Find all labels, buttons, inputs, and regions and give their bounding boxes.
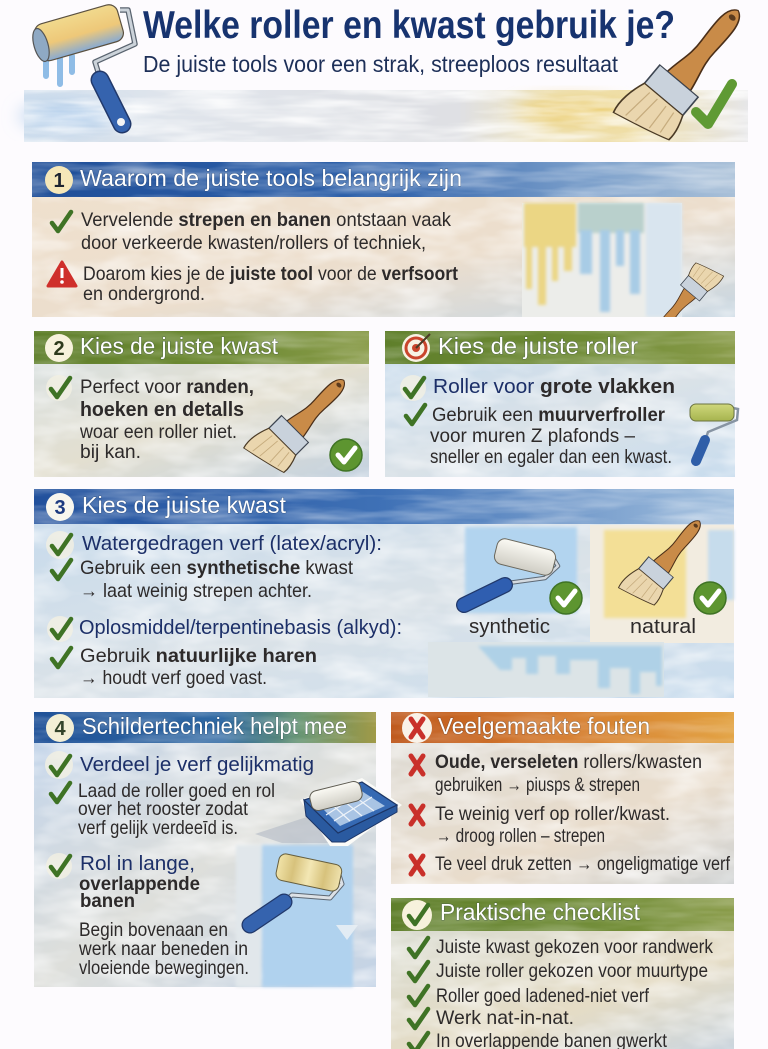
text: ondergrond: en ondergrond. [83,283,205,305]
swatch: natural [590,525,734,643]
text: item 4: Werk nat-in-nat. [436,1007,574,1029]
text: laad de roller: Laad de roller goed en rol [78,780,275,802]
icon: badge natural [694,582,726,614]
icon: striped roller [250,853,343,925]
header: checklist: Praktische checklist [440,899,641,925]
icon: paint brush top right [612,0,761,151]
icon: badge synthetic [550,582,582,614]
icon: check [406,405,425,424]
text: roller voor grote vlakken: Roller voor grote vlakken [433,375,675,398]
icon: warning triangle [48,262,76,286]
header: section 1: Waarom de juiste tools belangrijk zijn [80,165,462,191]
icon: check [46,375,72,401]
icon: check [46,531,74,559]
text: te weinig verf: Te weinig verf op roller/kwast. [435,803,670,825]
header banner: paint strokes [20,90,748,142]
header: section 3 [34,489,734,524]
header: section 1: 1 [53,170,65,192]
text: muurverfroller: sneller en egaler dan een kwast. [430,446,672,468]
swatch: drips [428,642,664,697]
text: randen hoeken details: hoeken en detalls [80,399,244,421]
icon: x [411,856,423,874]
text: juiste tool: Doarom kies je de juiste tool voor de verfsoort [83,263,458,285]
icon: check [409,938,428,957]
icon: check [52,560,71,579]
text: randen hoeken details: Perfect voor randen, [80,376,254,398]
subtitle: De juiste tools voor een strak, streeploos resultaat [143,51,619,77]
header: section 3: Kies de juiste kwast [82,492,287,518]
text: laad de roller: verf gelijk verdeeīd is. [78,817,238,839]
text: muurverfroller: voor muren Z plafonds – [430,425,635,447]
text: natuurlijke haren: Gebruik natuurlijke haren [80,645,317,667]
header: section 4: Schildertechniek helpt mee [82,713,347,739]
icon: check [52,648,71,667]
text: laat weinig strepen: → laat weinig strepen achter. [80,580,312,602]
text: begin bovenaan [78,919,249,979]
icon: green badge [330,439,362,471]
label: natural: natural [630,616,696,638]
swatch: synthetic [465,527,577,613]
icon: x [411,806,423,824]
icon: white roller [464,537,558,605]
header: section 1 [32,162,735,197]
text: rol in lange banen: Rol in lange, [80,852,195,875]
text: oplosmiddel: Oplosmiddel/terpentinebasis (alkyd): [79,616,402,639]
text: rol in lange banen: overlappende [79,874,200,895]
panel 3: kies de juiste kwast [34,489,734,698]
icon: check [409,1033,428,1049]
text: synthetische kwast: Gebruik een synthetische kwast [80,557,354,579]
header: roller [385,331,735,364]
text: begin bovenaan: werk naar beneden in [78,938,248,960]
header: section 2 [34,331,369,364]
header: checklist [391,898,734,931]
text: begin bovenaan: vloeiende bewegingen. [79,957,249,979]
panel 4: schildertechniek [34,712,376,987]
icon: brush [243,363,360,480]
text: muurverfroller: Gebruik een muurverfroller [432,404,665,426]
icon: check [46,853,72,879]
text: item 1: Juiste kwast gekozen voor randwerk [436,936,713,958]
text: randen hoeken details [79,376,254,463]
panel: veelgemaakte fouten [391,712,734,884]
text: oude rollers [435,751,702,796]
icon: x [411,756,423,774]
text: houdt verf vast: → houdt verf goed vast. [80,667,267,689]
header: section 4: 4 [54,718,66,740]
text: oude rollers: gebruiken → piusps & strepen [435,774,640,796]
text: laad de roller [78,780,275,839]
icon: green roller [690,404,738,461]
text: item 2: Juiste roller gekozen voor muurtype [436,960,708,982]
text: te weinig verf: → droog rollen – strepen [436,825,605,847]
panel 2: kies de juiste kwast [34,331,369,480]
text: laad de roller: over het rooster zodat [78,798,249,820]
text: muurverfroller [430,404,672,468]
panel: praktische checklist [391,898,734,1049]
illustration: paint streaks on wall [522,201,724,317]
header: fouten: Veelgemaakte fouten [438,713,650,739]
swatch: blue wall [236,845,358,987]
header: section 3: 3 [54,497,66,519]
label: synthetic: synthetic [469,616,550,638]
text: verkeerde kwasten: door verkeerde kwasten/rollers of techniek, [81,232,426,254]
header: fouten [391,712,734,743]
panel 1: waarom de juiste tools [32,162,735,317]
text: item 3: Roller goed ladened-niet verf [436,985,649,1007]
icon: check [409,1009,428,1028]
header: section 2: 2 [53,338,65,360]
text: te weinig verf [435,803,670,847]
text: rol in lange banen [79,852,200,912]
text: watergedragen verf: Watergedragen verf (latex/acryl): [82,532,382,555]
icon: paint tray [255,778,402,846]
icon: check [400,375,426,401]
text: rol in lange banen: banen [80,891,135,912]
icon: check [51,783,70,802]
icon: check [409,962,428,981]
icon: check [47,616,73,642]
text: begin bovenaan: Begin bovenaan en [79,919,228,941]
icon: check [45,751,73,779]
panel: kies de juiste roller [385,331,738,477]
icon: check [52,212,71,231]
title: Welke roller en kwast gebruik je? [143,4,675,47]
text: strepen en banen: Vervelende strepen en banen ontstaan vaak [81,209,451,231]
icon: green check top right [696,84,732,124]
header: roller: Kies de juiste roller [438,333,638,359]
icon: paint roller top left [30,3,135,126]
text: randen hoeken details: bij kan. [80,441,141,463]
text: verdeel je verf: Verdeel je verf gelijkmatig [80,753,314,776]
text: oude rollers: Oude, verseleten rollers/kwasten [435,751,702,773]
icon: brush natural [618,508,714,613]
header: section 4 [34,712,376,743]
text: randen hoeken details: woar een roller niet. [79,421,237,443]
icon: check [409,986,428,1005]
header: section 2: Kies de juiste kwast [80,333,279,359]
